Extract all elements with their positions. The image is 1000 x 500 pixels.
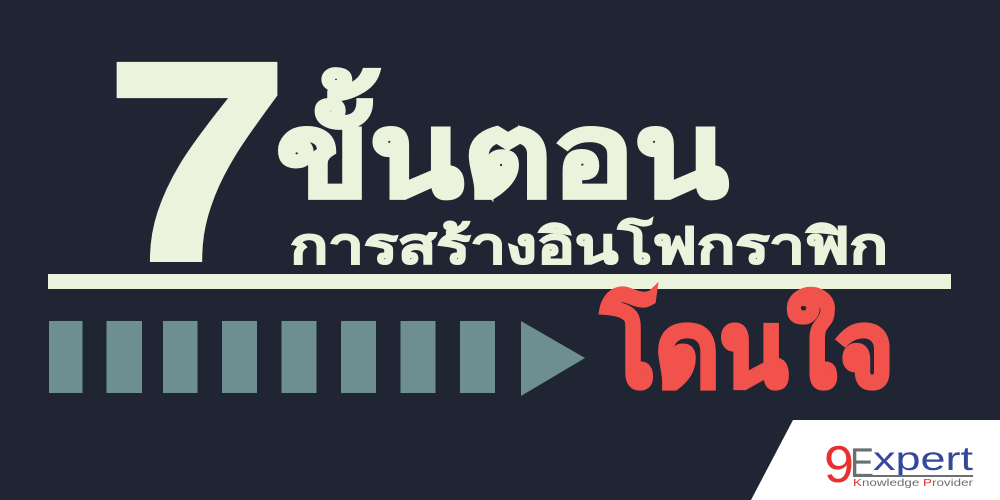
highlighted word: on target: โดนใจ (601, 288, 894, 409)
logo: 9Expert: 9 (824, 436, 854, 494)
logo: 9Expert: Knowledge Provider (853, 477, 974, 489)
title: steps: ขั้นตอน (276, 69, 728, 222)
logo: 9Expert (824, 436, 974, 494)
logo panel (751, 420, 1000, 500)
subtitle: creating infographics: การสร้างอินโฟกราฟิก (290, 217, 888, 274)
logo: 9Expert: E (850, 439, 874, 486)
logo: 9Expert: xpert (873, 440, 973, 477)
title numeral 7: 7 (105, 3, 290, 321)
divider rule (48, 274, 951, 289)
progress bar arrow (49, 321, 585, 396)
